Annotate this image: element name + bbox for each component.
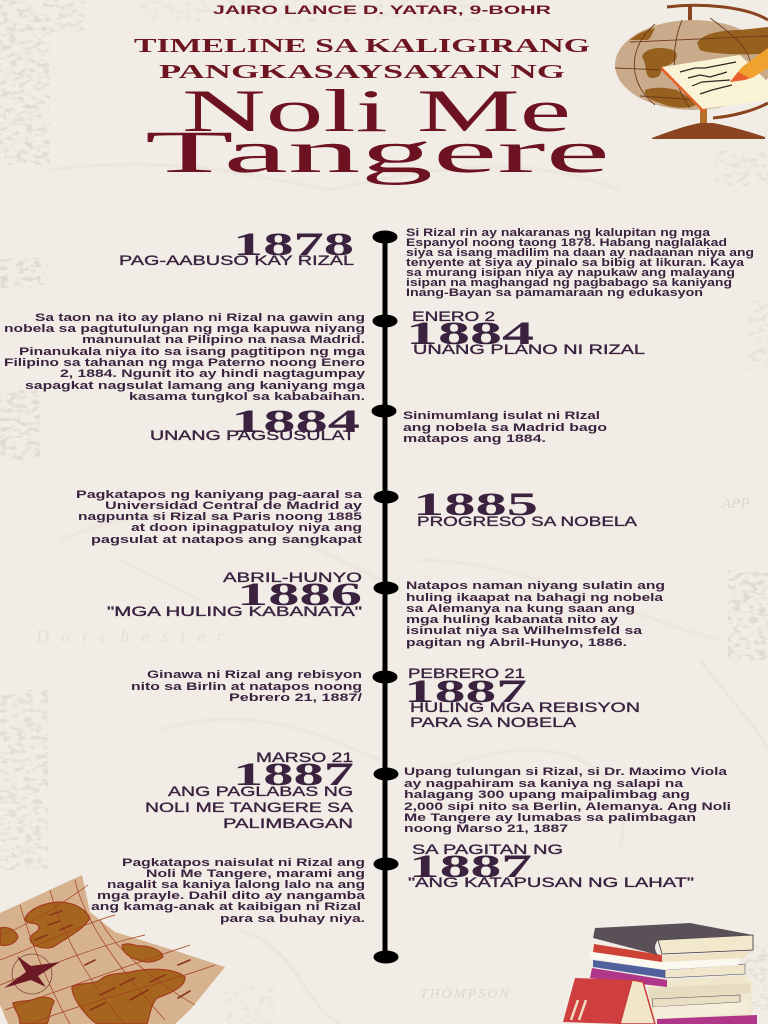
- entry: 1878 text: isipan na maghangad ng pagbabago sa kaniyang: [406, 277, 732, 289]
- entry: 1878 text: Inang-Bayan sa pamamaraan ng edukasyon: [406, 287, 703, 299]
- entry: 1886 text: isinulat niya sa Wilhelmsfeld sa: [406, 625, 643, 637]
- entry: Pebrero 21 1887 heading: [404, 665, 640, 730]
- entry: Enero 2 1884 heading: [406, 308, 645, 357]
- entry: Marso 21 1887 text: ay nagpahiram sa kaniya ng salapi na: [404, 778, 684, 790]
- entry: Pebrero 21 1887 heading: PEBRERO 21: [408, 665, 525, 681]
- title: [134, 35, 610, 185]
- entry: 1885 heading: PROGRESO SA NOBELA: [417, 513, 638, 529]
- entry: sa pagitan ng 1887 text: mga prayle. Dahil dito ay nangamba: [97, 890, 366, 902]
- entry: Pebrero 21 1887 text: nito sa Birlin at natapos noong: [131, 681, 362, 693]
- entry: 1885 heading: [413, 487, 638, 529]
- entry: 1886 heading: 1886: [237, 577, 362, 613]
- entry: Marso 21 1887 heading: PALIMBAGAN: [223, 815, 353, 831]
- entry: Pebrero 21 1887 text: [131, 669, 362, 704]
- entry: Enero 2 1884 text: [4, 312, 366, 403]
- entry: sa pagitan ng 1887 text: Pagkatapos naisulat ni Rizal ang: [122, 857, 365, 869]
- entry: Enero 2 1884 text: manunulat na Pilipino na nasa Madrid.: [82, 334, 365, 346]
- entry: Enero 2 1884 text: Filipino sa tahanan ng mga Paterno noong Enero: [4, 357, 366, 369]
- entry: Pebrero 21 1887 heading: PARA SA NOBELA: [410, 714, 577, 730]
- entry: Pebrero 21 1887 heading: 1887: [404, 674, 527, 710]
- entry: sa pagitan ng 1887 heading: "ANG KATAPUSAN NG LAHAT": [408, 874, 694, 890]
- entry: 1885 text: nagpunta si Rizal sa Paris noong 1885: [78, 511, 362, 523]
- entry: unang pagsusulat text: [403, 410, 608, 445]
- entry: Enero 2 1884 text: kasama tungkol sa kababaihan.: [129, 391, 365, 403]
- entry: 1885 text: [76, 489, 363, 546]
- title: PANGKASAYSAYAN NG: [159, 61, 566, 83]
- entry: Pebrero 21 1887 heading: HULING MGA REBISYON: [410, 699, 640, 715]
- entry: Marso 21 1887 text: 2,000 sipi nito sa Berlin, Alemanya. Ang Noli: [404, 801, 731, 813]
- entry: 1886 text: pagitan ng Abril-Hunyo, 1886.: [406, 637, 627, 649]
- entry: 1878 heading: PAG-AABUSO KAY RIZAL: [119, 252, 354, 268]
- entry: 1878 text: Si Rizal rin ay nakaranas ng kalupitan ng mga: [406, 227, 711, 239]
- title: TIMELINE SA KALIGIRANG: [134, 35, 591, 57]
- entry: Marso 21 1887 heading: NOLI ME TANGERE SA: [145, 799, 354, 815]
- timeline spine and dots: [372, 230, 398, 964]
- entry: 1886 text: Natapos naman niyang sulatin ang: [406, 580, 665, 592]
- entry: 1878 text: Espanyol noong taong 1878. Habang naglalakad: [406, 237, 727, 249]
- entry: unang pagsusulat text: matapos ang 1884.: [403, 433, 546, 445]
- icon: stack of books: [563, 923, 757, 1024]
- entry: unang pagsusulat heading: 1884: [231, 404, 360, 440]
- entry: sa pagitan ng 1887 text: [91, 857, 366, 925]
- entry: 1885 heading: 1885: [413, 487, 538, 523]
- icon: treasure map: [0, 875, 225, 1024]
- entry: 1885 text: pagsulat at natapos ang sangkapat: [91, 534, 363, 546]
- entry: 1878 text: tenyente at siya ay pinalo sa bibig at likuran. Kaya: [406, 257, 745, 269]
- entry: Enero 2 1884 text: Pinanukala niya ito sa isang pagtitipon ng mga: [19, 346, 366, 358]
- entry: Enero 2 1884 heading: 1884: [406, 316, 534, 352]
- entry: sa pagitan ng 1887 heading: 1887: [409, 849, 532, 885]
- entry: sa pagitan ng 1887 heading: [408, 841, 694, 890]
- entry: Marso 21 1887 text: halagang 300 upang maipalimbag ang: [404, 789, 690, 801]
- entry: sa pagitan ng 1887 text: para sa buhay niya.: [220, 913, 365, 925]
- entry: 1878 text: siya sa isang madilim na daan ay nadaanan niya ang: [406, 247, 754, 259]
- entry: unang pagsusulat text: Sinimumlang isulat ni RIzal: [403, 410, 600, 422]
- entry: 1886 text: [406, 580, 665, 649]
- entry: 1885 text: Pagkatapos ng kaniyang pag-aaral sa: [76, 489, 363, 501]
- entry: Pebrero 21 1887 text: Ginawa ni Rizal ang rebisyon: [147, 669, 362, 681]
- entry: 1878 heading: [119, 227, 354, 268]
- entry: 1878 heading: 1878: [233, 227, 354, 263]
- entry: Enero 2 1884 heading: UNANG PLANO NI RIZAL: [413, 341, 645, 357]
- entry: 1885 text: at doon ipinagpatuloy niya ang: [131, 522, 362, 534]
- entry: Marso 21 1887 heading: [145, 749, 354, 831]
- title: Tangere: [145, 119, 610, 185]
- background: aged paper map: Dorchester: [35, 626, 236, 646]
- entry: Pebrero 21 1887 text: Pebrero 21, 1887/: [229, 692, 362, 704]
- entry: 1886 text: mga huling kabanata nito ay: [406, 614, 618, 626]
- entry: 1886 text: huling ikaapat na bahagi ng nobela: [406, 592, 664, 604]
- entry: sa pagitan ng 1887 text: Noli Me Tangere, marami ang: [146, 868, 365, 880]
- entry: 1886 heading: ABRIL-HUNYO: [223, 569, 362, 585]
- entry: Marso 21 1887 text: noong Marso 21, 1887: [404, 823, 568, 835]
- author line: JAIRO LANCE D. YATAR, 9-BOHR: [213, 5, 552, 17]
- background: aged paper map: APP: [721, 496, 750, 512]
- entry: 1878 text: sa murang isipan niya ay napukaw ang malayang: [406, 267, 735, 279]
- entry: 1886 heading: [107, 569, 362, 619]
- entry: unang pagsusulat heading: UNANG PAGSUSULAT: [150, 427, 356, 443]
- entry: 1885 text: Universidad Central de Madrid ay: [105, 500, 362, 512]
- entry: Marso 21 1887 heading: MARSO 21: [256, 749, 353, 765]
- entry: sa pagitan ng 1887 text: ang kamag-anak at kaibigan ni Rizal: [91, 901, 361, 913]
- entry: Marso 21 1887 text: Me Tangere ay lumabas sa palimbagan: [404, 812, 696, 824]
- entry: 1886 text: sa Alemanya na kung saan ang: [406, 603, 635, 615]
- entry: Enero 2 1884 text: nobela sa pagtutulungan ng mga kapuwa niyang: [4, 323, 365, 335]
- entry: unang pagsusulat text: ang nobela sa Madrid bago: [403, 422, 608, 434]
- entry: Marso 21 1887 heading: 1887: [233, 757, 354, 793]
- entry: 1878 text: [406, 227, 754, 299]
- entry: 1886 heading: "MGA HULING KABANATA": [107, 603, 362, 619]
- entry: Marso 21 1887 text: [404, 766, 731, 835]
- entry: unang pagsusulat heading: [150, 404, 360, 443]
- entry: Marso 21 1887 text: Upang tulungan si Rizal, si Dr. Maximo Viola: [404, 766, 728, 778]
- icon: globe with book and pencil: [615, 5, 768, 139]
- entry: Enero 2 1884 text: Sa taon na ito ay plano ni Rizal na gawin ang: [35, 312, 365, 324]
- title: Noli Me: [182, 78, 571, 144]
- background: aged paper map: THOMPSON: [420, 987, 511, 1002]
- entry: Enero 2 1884 heading: ENERO 2: [412, 308, 495, 324]
- entry: Enero 2 1884 text: sapagkat nagsulat lamang ang kaniyang mga: [25, 380, 366, 392]
- entry: Marso 21 1887 heading: ANG PAGLABAS NG: [168, 783, 353, 799]
- entry: sa pagitan ng 1887 text: nagalit sa kaniya lalong lalo na ang: [107, 879, 365, 891]
- entry: sa pagitan ng 1887 heading: SA PAGITAN NG: [412, 841, 563, 857]
- entry: Enero 2 1884 text: 2, 1884. Ngunit ito ay hindi nagtagumpay: [60, 368, 365, 380]
